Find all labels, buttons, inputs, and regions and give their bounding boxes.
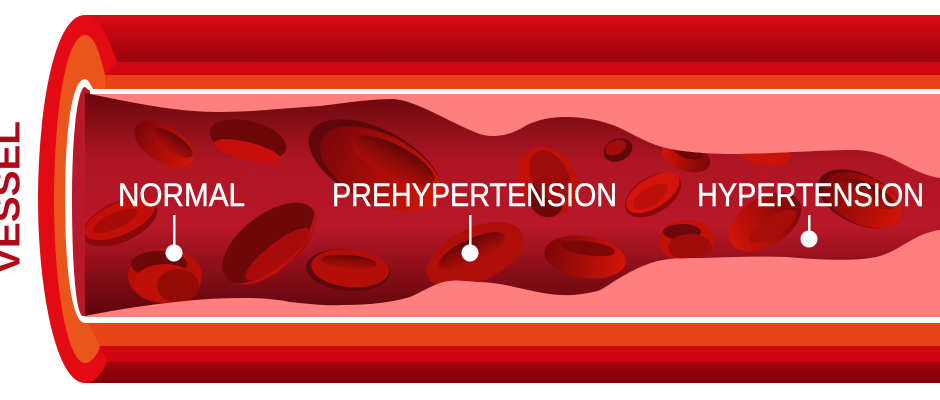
cell [210, 119, 286, 163]
blood channel [75, 90, 940, 320]
inner wall shading [72, 87, 90, 316]
label: hypertension [697, 177, 924, 248]
cell [728, 192, 802, 252]
cell [426, 222, 524, 284]
cell [308, 119, 442, 212]
label: prehypertension [332, 177, 617, 262]
cell [306, 248, 390, 292]
cell [604, 138, 632, 162]
cell [128, 249, 202, 303]
cell [222, 202, 316, 284]
label: prehypertension: PREHYPERTENSION [332, 177, 617, 213]
cell [134, 121, 194, 168]
red blood cells [85, 119, 902, 303]
cell [625, 172, 681, 218]
plaque layer [85, 94, 940, 317]
cell [518, 146, 578, 218]
cell [740, 152, 791, 166]
cell [662, 147, 710, 172]
cell [818, 169, 902, 229]
label: normal: NORMAL [118, 177, 245, 213]
white inner lining [65, 79, 940, 323]
label: normal [118, 177, 245, 262]
cell [85, 198, 158, 246]
cell [659, 220, 715, 262]
cell [544, 236, 626, 279]
vessel opening rim [38, 15, 117, 383]
